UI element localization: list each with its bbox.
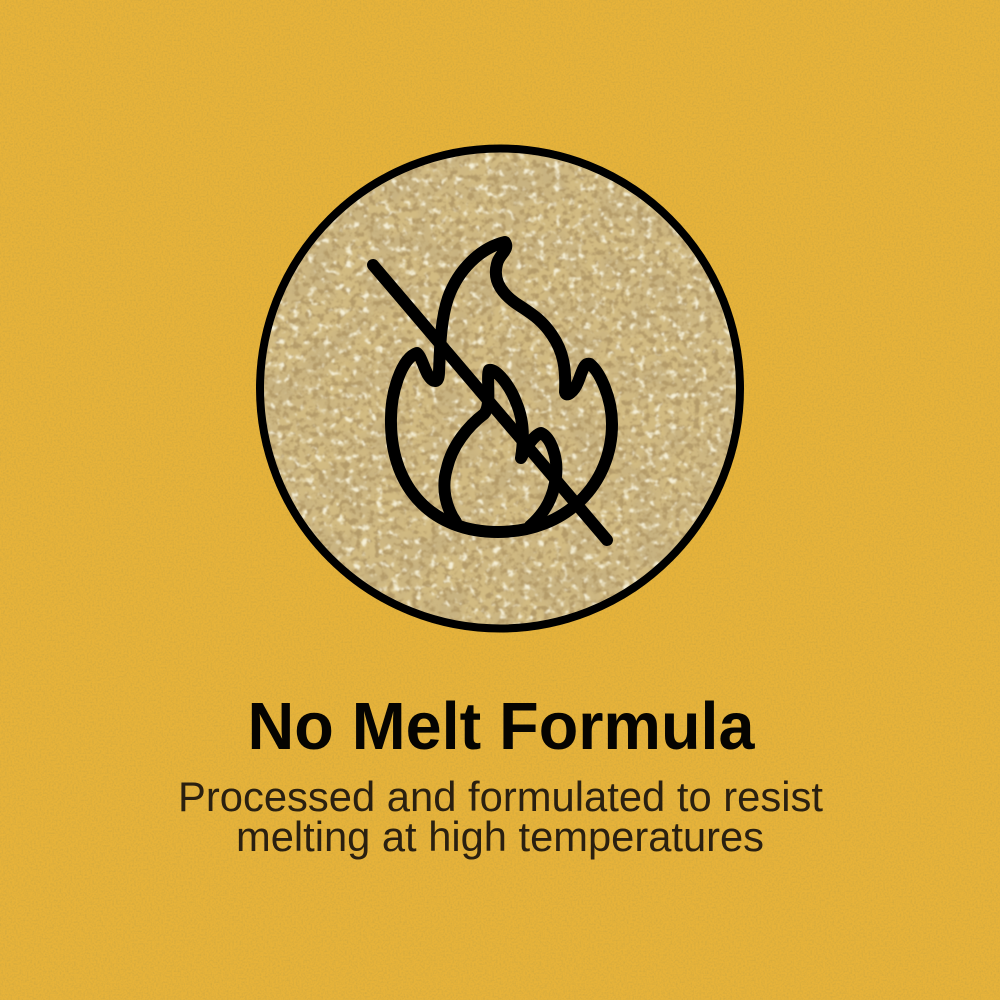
description line 2: melting at high temperatures xyxy=(236,813,764,860)
description line 1: Processed and formulated to resist xyxy=(178,773,823,820)
icon: crossed-out flame xyxy=(373,242,612,540)
title: No Melt Formula xyxy=(248,689,755,764)
icon: slash line xyxy=(373,265,607,540)
panel: cornmeal texture disc xyxy=(256,145,744,633)
icon: outer flame xyxy=(391,242,612,532)
icon: inner flame xyxy=(444,370,556,526)
description text xyxy=(178,773,823,860)
